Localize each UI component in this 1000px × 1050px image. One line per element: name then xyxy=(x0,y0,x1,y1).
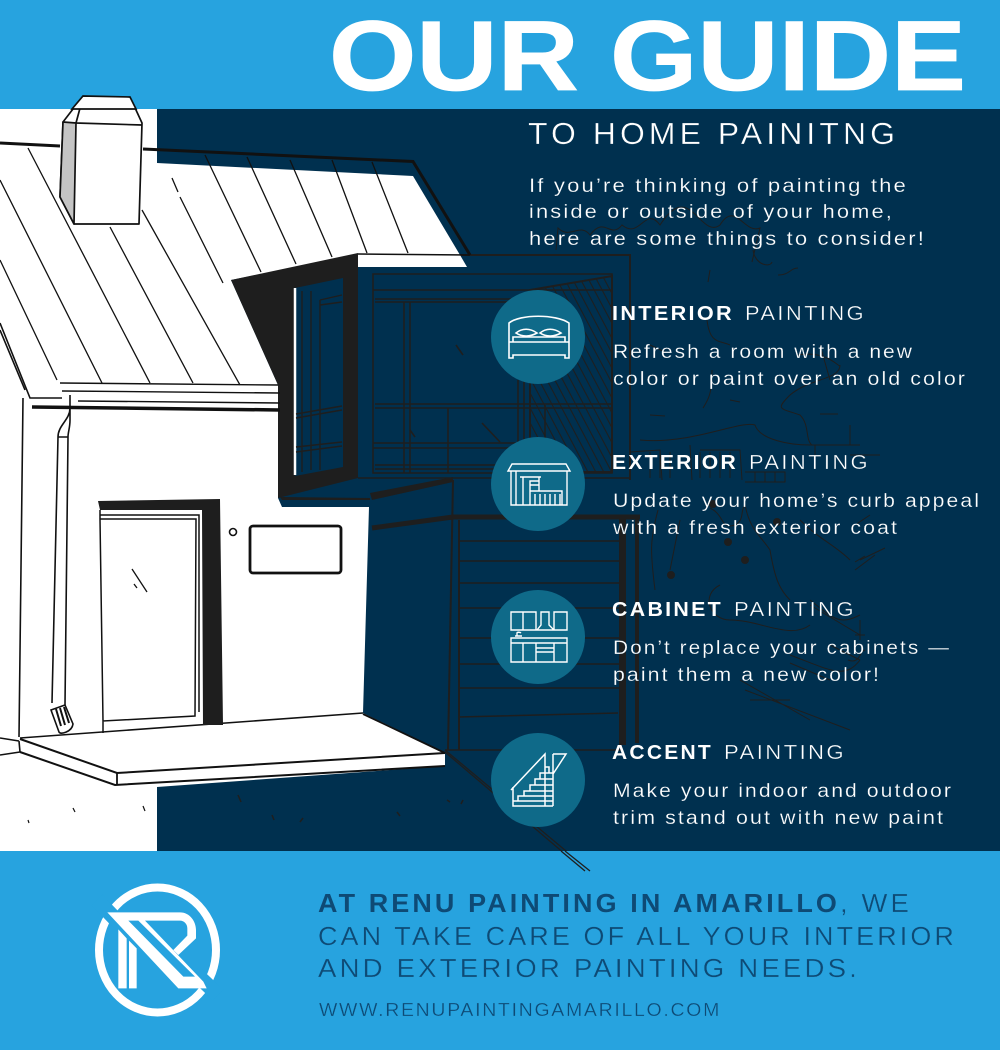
closing statement: CAN TAKE CARE OF ALL YOUR INTERIOR xyxy=(318,921,957,951)
item: accent painting: trim stand out with new paint xyxy=(613,807,945,829)
top band xyxy=(0,0,1000,109)
wall window and knob xyxy=(230,526,341,573)
overhang under gable xyxy=(280,477,453,500)
item: exterior painting: with a fresh exterior coat xyxy=(612,517,899,539)
intro text: inside or outside of your home, xyxy=(529,201,894,223)
door xyxy=(98,499,223,733)
title: OUR GUIDE xyxy=(329,0,966,111)
item: exterior painting: PAINTING xyxy=(749,451,870,474)
item: interior painting: Refresh a room with a new xyxy=(613,341,914,363)
item: cabinet painting: PAINTING xyxy=(734,598,856,621)
intro text: here are some things to consider! xyxy=(529,228,926,250)
wall and downspout xyxy=(0,395,445,823)
icon: bed xyxy=(491,290,585,384)
item: interior painting xyxy=(491,290,967,390)
roof lines xyxy=(0,143,470,410)
logo xyxy=(97,888,218,1012)
panel: navy background xyxy=(157,109,1000,851)
black gable wall xyxy=(231,253,358,498)
item: cabinet painting: CABINET xyxy=(612,598,723,621)
icon: house front xyxy=(491,437,585,531)
gable window lines xyxy=(296,291,342,472)
subtitle: TO HOME PAINITNG xyxy=(528,116,899,151)
right side of house: sketch lines on navy xyxy=(238,255,640,871)
sketch scribbles on the right xyxy=(556,207,885,730)
item: interior painting: INTERIOR xyxy=(612,302,734,325)
intro text: If you’re thinking of painting the xyxy=(529,175,908,197)
closing statement: , WE xyxy=(840,888,912,918)
item: exterior painting xyxy=(491,437,981,539)
item: accent painting: ACCENT xyxy=(612,741,713,764)
item: accent painting: Make your indoor and outdoor xyxy=(613,780,953,802)
house white body xyxy=(0,109,460,851)
item: interior painting: color or paint over an old color xyxy=(613,368,967,390)
closing statement: AND EXTERIOR PAINTING NEEDS. xyxy=(318,953,860,983)
item: accent painting: PAINTING xyxy=(724,741,846,764)
illustration: house sketch xyxy=(0,96,885,871)
icon: kitchen cabinets xyxy=(491,590,585,684)
item: cabinet painting: Don’t replace your cabinets — xyxy=(613,637,951,659)
icon: staircase xyxy=(491,733,585,827)
intro text xyxy=(529,175,926,250)
item: exterior painting: Update your home’s curb appeal xyxy=(613,490,981,512)
item: exterior painting: EXTERIOR xyxy=(612,451,738,474)
website: WWW.RENUPAINTINGAMARILLO.COM xyxy=(319,1000,721,1020)
closing statement xyxy=(318,888,957,983)
chimney top over band xyxy=(72,96,136,109)
item: cabinet painting xyxy=(491,590,951,686)
item: accent painting xyxy=(491,733,953,829)
closing statement: AT RENU PAINTING IN AMARILLO xyxy=(318,888,840,918)
perspective lines crossing into band xyxy=(561,851,590,871)
item: interior painting: PAINTING xyxy=(745,302,866,325)
bottom band xyxy=(0,851,1000,1050)
chimney xyxy=(60,96,142,224)
item: cabinet painting: paint them a new color! xyxy=(613,664,881,686)
